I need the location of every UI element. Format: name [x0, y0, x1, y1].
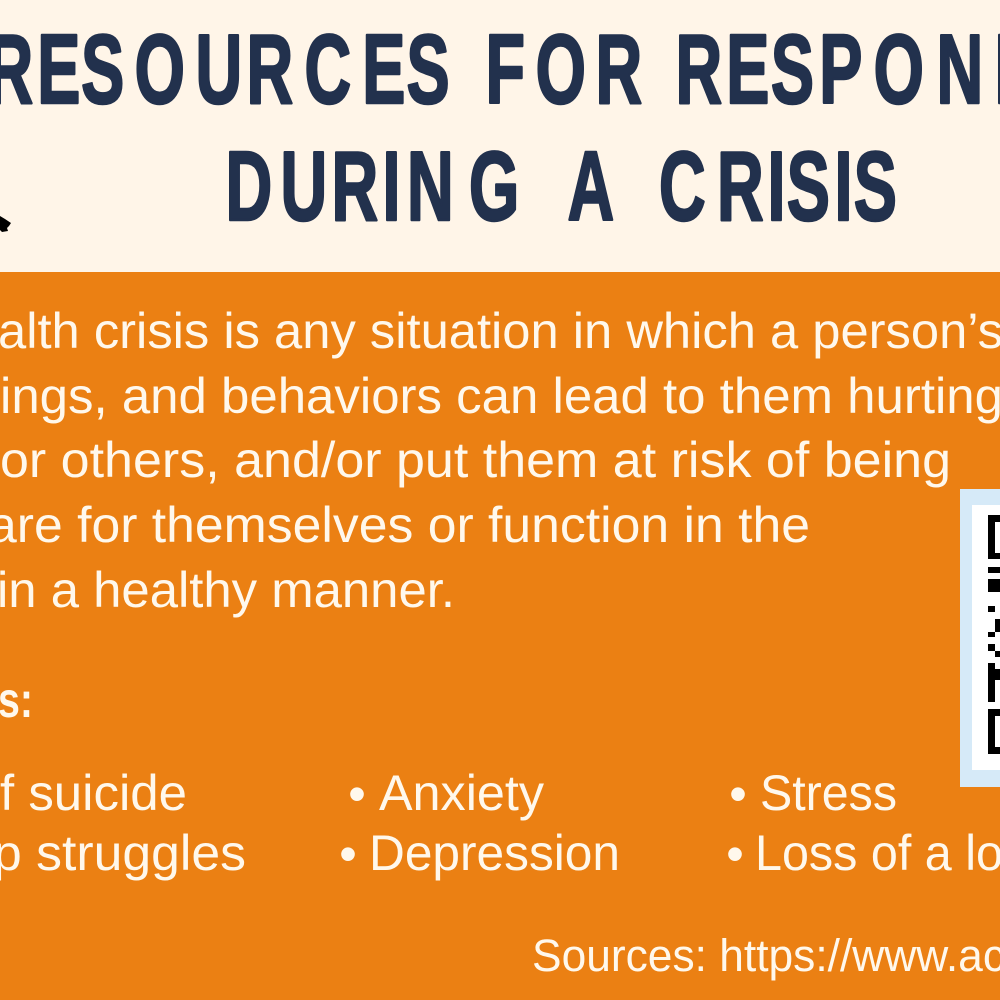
bullet: • — [729, 766, 747, 822]
QR code — [960, 489, 1000, 787]
list item: f suicide — [0, 765, 187, 821]
bullet: • — [726, 826, 744, 882]
QR frame — [960, 489, 1000, 787]
list item: Stress — [760, 765, 897, 821]
definition line 2: ings, and behaviors can lead to them hurting — [0, 368, 1000, 424]
list: column 1 — [0, 765, 246, 881]
definition line 4: are for themselves or function in the — [0, 497, 810, 553]
definition line 1: alth crisis is any situation in which a person’s — [0, 303, 1000, 359]
icon: cropped black bird — [0, 216, 11, 232]
list item: Anxiety — [379, 765, 544, 821]
bullet: • — [348, 766, 366, 822]
list: column 3 — [726, 765, 1000, 882]
definition text — [0, 303, 1000, 618]
QR modules — [988, 515, 1000, 754]
panel: orange content — [0, 272, 1000, 1000]
sources: Sources: https://www.ac — [532, 930, 1000, 981]
list item: p struggles — [0, 825, 246, 881]
title line 2: DURING A CRISIS — [225, 131, 897, 241]
list item: Depression — [369, 825, 620, 881]
definition line 5: in a healthy manner. — [0, 562, 455, 618]
definition line 3: or others, and/or put them at risk of being — [0, 432, 951, 488]
list: column 2 — [339, 765, 620, 882]
QR background — [972, 505, 1000, 770]
title — [0, 14, 1000, 241]
bullet: • — [339, 826, 357, 882]
header panel — [0, 0, 1000, 272]
